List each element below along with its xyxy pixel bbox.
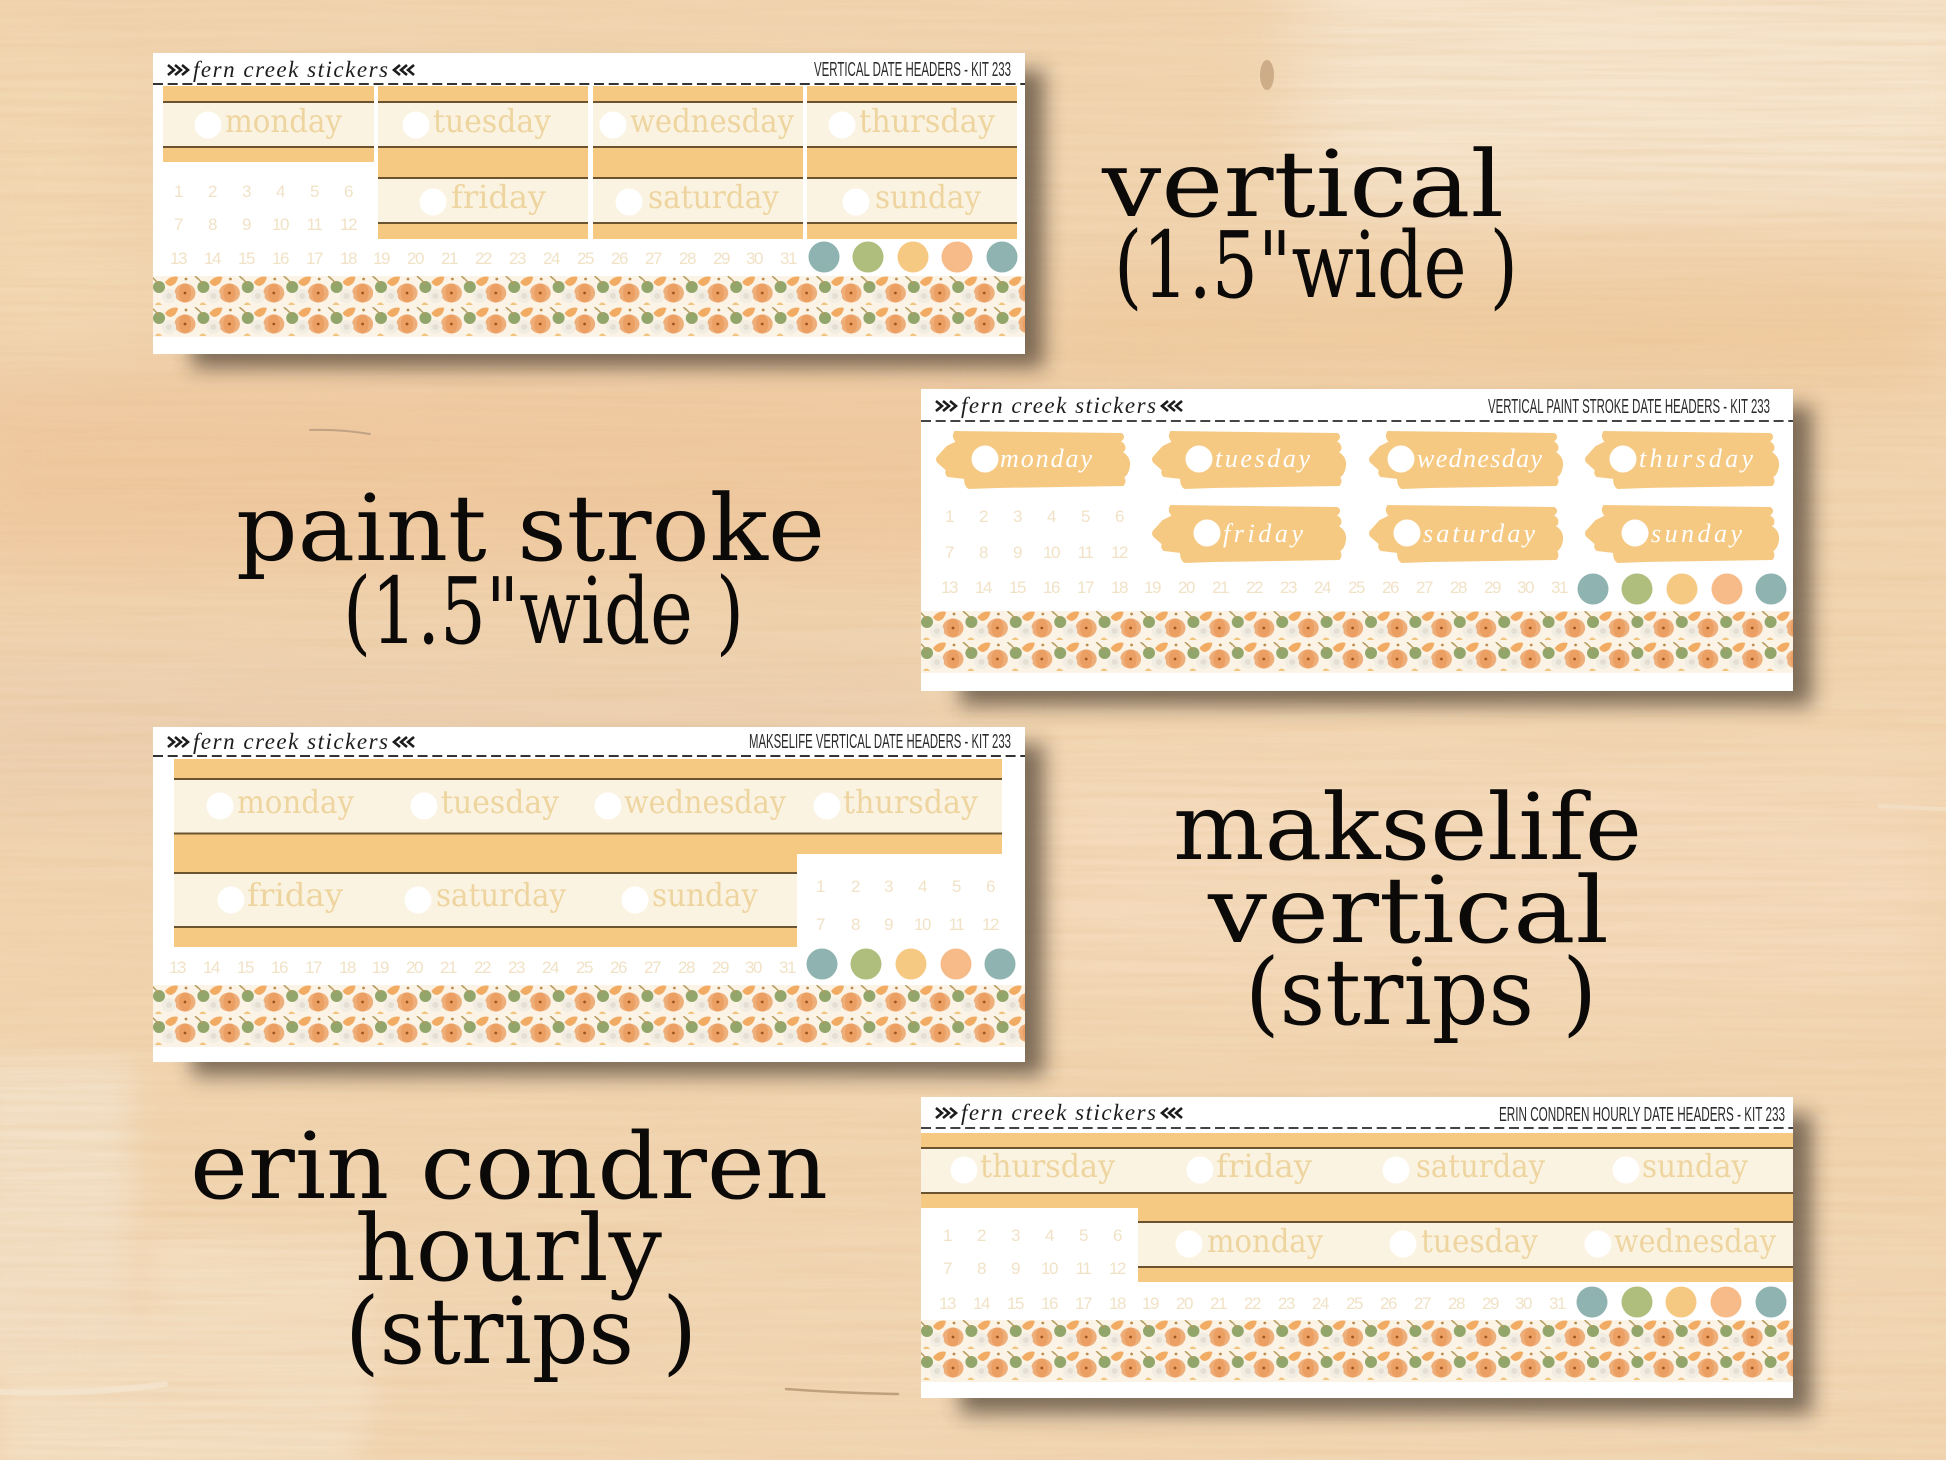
date numbers: 10 [1041, 1259, 1058, 1278]
date numbers: 11 [307, 215, 322, 234]
date numbers: 5 [1081, 507, 1090, 526]
brush: monday: monday [1000, 444, 1092, 473]
day tiles: thursday [859, 102, 995, 140]
date numbers: 4 [276, 182, 285, 201]
date numbers: 16 [271, 958, 288, 977]
date numbers: 2 [977, 1226, 986, 1245]
date numbers: 3 [1013, 507, 1022, 526]
date numbers: 15 [1009, 578, 1026, 597]
date numbers: 16 [1043, 578, 1060, 597]
date numbers: 17 [306, 249, 323, 268]
day strips: friday [247, 876, 343, 914]
heading: paint stroke 1.5 inch wide: paint stroke [236, 475, 825, 582]
brush: friday [1153, 506, 1345, 562]
wood streak marks [0, 430, 1946, 1394]
day strips: saturday [1416, 1147, 1545, 1185]
date numbers: 29 [1482, 1294, 1499, 1313]
brand logo: fern creek stickers [193, 729, 388, 754]
day strips: monday [237, 783, 354, 821]
date numbers: 9 [884, 915, 893, 934]
date numbers: 25 [577, 249, 594, 268]
brush: wednesday [1370, 432, 1562, 488]
date numbers: 12 [340, 215, 357, 234]
day strips: tuesday [441, 783, 559, 821]
date numbers: 31 [780, 249, 797, 268]
date numbers: 29 [713, 249, 730, 268]
date numbers: 10 [1043, 543, 1060, 562]
date numbers: 30 [1517, 578, 1534, 597]
heading: paint stroke 1.5 inch wide [236, 475, 825, 665]
day tiles: saturday [648, 178, 779, 216]
brush: tuesday [1153, 432, 1345, 488]
date numbers: 11 [949, 915, 964, 934]
date numbers: 17 [1077, 578, 1094, 597]
date numbers: 9 [1011, 1259, 1020, 1278]
heading: vertical 1.5 inch wide: (1.5"wide ) [1114, 212, 1518, 319]
date numbers: 23 [1280, 578, 1297, 597]
date numbers: 24 [542, 958, 559, 977]
sheet title: VERTICAL DATE HEADERS - KIT 233 [814, 59, 1011, 81]
brush: monday [937, 432, 1129, 488]
day strips: thursday [843, 783, 978, 821]
heading: makselife vertical strips: vertical [1207, 857, 1609, 964]
day tiles [163, 86, 1017, 239]
date numbers: 14 [975, 578, 992, 597]
heading: erin condren hourly strips: erin condren [190, 1113, 828, 1220]
date numbers: 14 [203, 958, 220, 977]
date numbers: 5 [952, 877, 961, 896]
day tiles: tuesday [433, 102, 551, 140]
date numbers: 20 [1176, 1294, 1193, 1313]
date numbers: 15 [238, 249, 255, 268]
date numbers: 1 [943, 1226, 952, 1245]
date numbers: 16 [1041, 1294, 1058, 1313]
panel: paint stroke sheet [921, 389, 1793, 691]
date numbers: 13 [941, 578, 958, 597]
day strips: wednesday [1614, 1222, 1776, 1260]
brand logo: fern creek stickers [193, 57, 388, 82]
date numbers: 20 [1178, 578, 1195, 597]
brush: friday: friday [1223, 519, 1303, 548]
date numbers: 31 [1549, 1294, 1566, 1313]
heading: makselife vertical strips [1173, 774, 1642, 1046]
date numbers: 23 [1278, 1294, 1295, 1313]
panel: vertical sheet [153, 53, 1025, 354]
day strips: tuesday [1421, 1222, 1538, 1260]
heading: makselife vertical strips: makselife [1173, 774, 1642, 881]
day tiles: monday [225, 102, 342, 140]
heading: paint stroke 1.5 inch wide: (1.5"wide ) [343, 558, 744, 665]
date numbers: 25 [1348, 578, 1365, 597]
date numbers: 25 [576, 958, 593, 977]
day tiles: friday [451, 178, 546, 216]
heading: erin condren hourly strips [190, 1113, 828, 1385]
date numbers: 16 [272, 249, 289, 268]
date numbers: 31 [1551, 578, 1568, 597]
colour dots [1576, 1286, 1786, 1318]
date numbers: 6 [1115, 507, 1124, 526]
date numbers: 13 [169, 958, 186, 977]
date numbers: 5 [1079, 1226, 1088, 1245]
date numbers: 15 [1007, 1294, 1024, 1313]
date numbers: 28 [1448, 1294, 1465, 1313]
date numbers: 7 [945, 543, 954, 562]
date numbers: 22 [475, 249, 492, 268]
date numbers: 28 [679, 249, 696, 268]
brush: sunday [1586, 506, 1778, 562]
date numbers: 22 [474, 958, 491, 977]
date numbers: 8 [977, 1259, 986, 1278]
colour dots [808, 242, 1018, 272]
date numbers: 8 [979, 543, 988, 562]
date numbers: 4 [1047, 507, 1056, 526]
day strips: friday [1216, 1147, 1312, 1185]
date numbers: 30 [746, 249, 763, 268]
colour dots [806, 948, 1016, 980]
brand logo: fern creek stickers [961, 393, 1156, 418]
date numbers: 28 [678, 958, 695, 977]
date numbers: 10 [914, 915, 931, 934]
date numbers: 24 [543, 249, 560, 268]
pumpkin pattern strip [153, 276, 1025, 337]
date numbers: 11 [1078, 543, 1093, 562]
heading: vertical 1.5 inch wide [1101, 131, 1518, 319]
date numbers: 4 [918, 877, 927, 896]
panel: erin condren sheet [921, 1097, 1793, 1398]
day strips: sunday [652, 876, 758, 914]
date numbers: 21 [440, 958, 457, 977]
date numbers: 18 [339, 958, 356, 977]
drop shadows [192, 70, 1812, 1414]
date numbers: 18 [1111, 578, 1128, 597]
date numbers: 31 [779, 958, 796, 977]
date numbers: 6 [1113, 1226, 1122, 1245]
date numbers: 1 [816, 877, 825, 896]
sheet title: MAKSELIFE VERTICAL DATE HEADERS - KIT 233 [749, 731, 1011, 753]
pumpkin pattern strip [921, 1320, 1793, 1382]
heading: vertical 1.5 inch wide: vertical [1101, 131, 1504, 238]
brush: saturday: saturday [1423, 519, 1535, 548]
date numbers: 24 [1314, 578, 1331, 597]
day strips: sunday [1642, 1147, 1748, 1185]
date numbers: 6 [986, 877, 995, 896]
date numbers: 26 [1380, 1294, 1397, 1313]
date numbers: 5 [310, 182, 319, 201]
date numbers: 24 [1312, 1294, 1329, 1313]
panel: makselife sheet [153, 727, 1025, 1062]
date numbers: 20 [406, 958, 423, 977]
date numbers: 26 [611, 249, 628, 268]
date numbers: 29 [712, 958, 729, 977]
date numbers: 9 [242, 215, 251, 234]
date numbers: 3 [242, 182, 251, 201]
date numbers: 17 [305, 958, 322, 977]
date numbers: 19 [372, 958, 389, 977]
date numbers: 22 [1246, 578, 1263, 597]
date numbers: 3 [884, 877, 893, 896]
date numbers: 28 [1450, 578, 1467, 597]
date numbers: 8 [851, 915, 860, 934]
date numbers: 27 [645, 249, 662, 268]
date numbers: 27 [1416, 578, 1433, 597]
date numbers: 7 [816, 915, 825, 934]
date numbers: 29 [1484, 578, 1501, 597]
date numbers: 26 [1382, 578, 1399, 597]
heading: erin condren hourly strips: hourly [355, 1195, 662, 1302]
heading: makselife vertical strips: (strips ) [1245, 939, 1597, 1046]
icon: wood knot [1260, 60, 1274, 90]
day strips: saturday [436, 876, 566, 914]
date numbers: 14 [973, 1294, 990, 1313]
date numbers: 12 [982, 915, 999, 934]
brush: thursday [1586, 432, 1778, 488]
day strips [921, 1133, 1793, 1282]
date numbers: 21 [441, 249, 458, 268]
pumpkin pattern strip [921, 611, 1793, 673]
day strips: monday [1207, 1222, 1323, 1260]
day strips: wednesday [624, 783, 786, 821]
date numbers: 21 [1210, 1294, 1227, 1313]
day tiles: wednesday [630, 102, 794, 140]
date numbers: 18 [340, 249, 357, 268]
date numbers: 13 [939, 1294, 956, 1313]
date numbers: 1 [174, 182, 183, 201]
colour dots [1578, 574, 1786, 604]
date numbers: 7 [174, 215, 183, 234]
date numbers: 23 [508, 958, 525, 977]
brush: wednesday: wednesday [1417, 444, 1542, 473]
date numbers: 26 [610, 958, 627, 977]
date numbers: 6 [344, 182, 353, 201]
date numbers: 19 [373, 249, 390, 268]
date numbers: 14 [204, 249, 221, 268]
date numbers: 30 [1515, 1294, 1532, 1313]
day tiles: sunday [875, 178, 981, 216]
date numbers: 13 [170, 249, 187, 268]
day strips: thursday [980, 1147, 1115, 1185]
brush: thursday: thursday [1639, 444, 1753, 473]
date numbers: 27 [644, 958, 661, 977]
date numbers: 9 [1013, 543, 1022, 562]
date numbers: 12 [1109, 1259, 1126, 1278]
date numbers: 19 [1144, 578, 1161, 597]
brush: tuesday: tuesday [1215, 444, 1310, 473]
brush: saturday [1370, 506, 1562, 562]
date numbers: 1 [945, 507, 954, 526]
date numbers: 11 [1076, 1259, 1091, 1278]
date numbers: 2 [851, 877, 860, 896]
date numbers: 17 [1075, 1294, 1092, 1313]
date numbers: 8 [208, 215, 217, 234]
day strips [174, 759, 1002, 947]
heading: erin condren hourly strips: (strips ) [345, 1278, 697, 1385]
date numbers: 22 [1244, 1294, 1261, 1313]
date numbers: 27 [1414, 1294, 1431, 1313]
date numbers: 18 [1109, 1294, 1126, 1313]
date numbers: 2 [208, 182, 217, 201]
date numbers: 7 [943, 1259, 952, 1278]
date numbers: 21 [1212, 578, 1229, 597]
date numbers: 19 [1142, 1294, 1159, 1313]
date numbers: 2 [979, 507, 988, 526]
date numbers: 30 [745, 958, 762, 977]
date numbers: 3 [1011, 1226, 1020, 1245]
date numbers: 20 [407, 249, 424, 268]
brand logo: fern creek stickers [961, 1100, 1156, 1125]
date numbers: 15 [237, 958, 254, 977]
date numbers: 25 [1346, 1294, 1363, 1313]
date numbers: 4 [1045, 1226, 1054, 1245]
brush: sunday: sunday [1651, 519, 1742, 548]
pumpkin pattern strip [153, 985, 1025, 1047]
date numbers: 12 [1111, 543, 1128, 562]
date numbers: 23 [509, 249, 526, 268]
date numbers: 10 [272, 215, 289, 234]
